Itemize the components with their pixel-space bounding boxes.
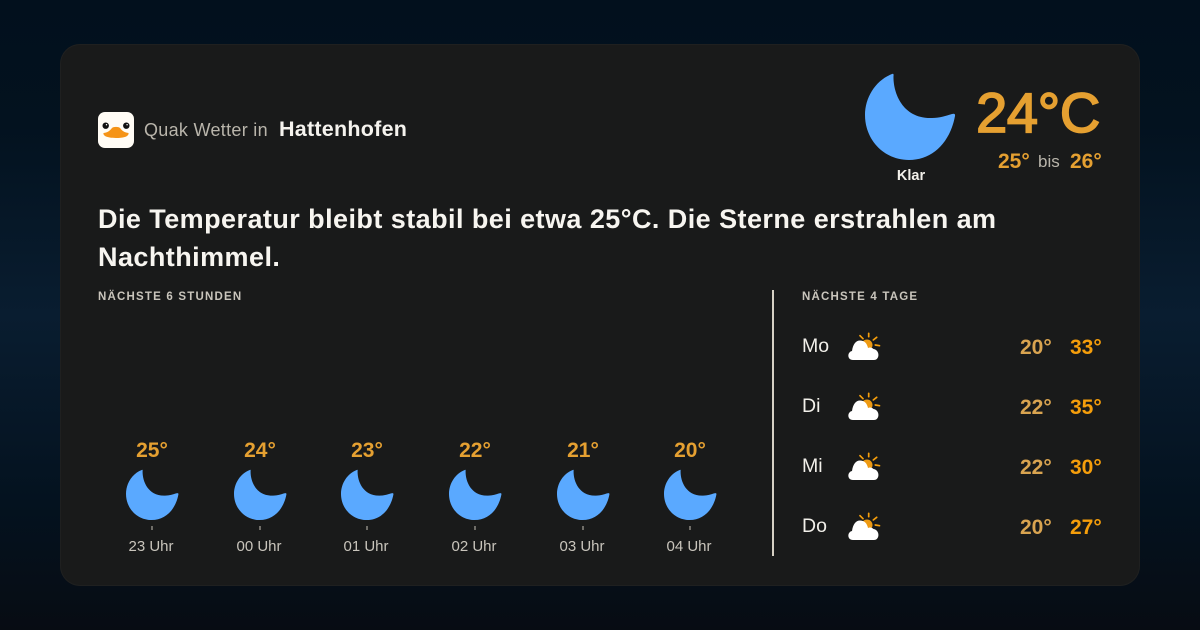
text: bis: bis [1038,152,1060,171]
divider [772,290,774,556]
text: time 02 Uhr: 02 Uhr [451,538,497,555]
text: temperature 00 Uhr: 24° [244,439,276,462]
text: Tuesday high: 35° [1070,396,1102,419]
icon: sun behind cloud Wednesday [848,452,880,480]
text: Thursday: Do [802,515,827,537]
icon: duck logo [98,112,134,148]
text: Monday: Mo [802,335,829,357]
text: time 04 Uhr: 04 Uhr [666,538,712,555]
heading: next 4 days: NÄCHSTE 4 TAGE [802,291,918,303]
text: time 00 Uhr: 00 Uhr [236,538,282,555]
icon: moon 04 Uhr [664,470,716,520]
icon: moon 01 Uhr [341,470,394,520]
text: Tuesday: Di [802,395,820,417]
icon: moon 23 Uhr [126,470,178,520]
icon: moon 00 Uhr [234,470,286,520]
text: Tuesday low: 22° [1020,396,1052,419]
text: Wednesday: Mi [802,455,823,477]
text: brand label: Quak Wetter in [144,120,268,140]
text: time 23 Uhr: 23 Uhr [128,538,174,555]
text: temperature 03 Uhr: 21° [567,439,599,462]
text: low: 25° [998,150,1030,173]
panel: weather card [60,44,1140,586]
icon: large moon [865,74,956,160]
text: Thursday low: 20° [1020,516,1052,539]
text: Monday high: 33° [1070,336,1102,359]
text: temperature 04 Uhr: 20° [674,439,706,462]
icon: sun behind cloud Monday [848,332,880,360]
heading: next 6 hours: NÄCHSTE 6 STUNDEN [98,291,242,303]
panel: hourly forecast [126,439,716,555]
icon: moon 02 Uhr [449,470,502,520]
text: high: 26° [1070,150,1102,173]
text: temperature range [998,150,1102,173]
text: condition: Klar [897,168,925,184]
tick marks [151,526,691,530]
text: temperature 02 Uhr: 22° [459,439,491,462]
text: temperature 23 Uhr: 25° [136,439,168,462]
icon: sun behind cloud Thursday [848,512,880,540]
text: time 01 Uhr: 01 Uhr [343,538,389,555]
text: Thursday high: 27° [1070,516,1102,539]
text: Wednesday high: 30° [1070,456,1102,479]
text: city: Hattenhofen [279,117,407,141]
text: Monday low: 20° [1020,336,1052,359]
heading: summary [98,204,996,272]
icon: sun behind cloud Tuesday [848,392,880,420]
text: temperature 01 Uhr: 23° [351,439,383,462]
text: time 03 Uhr: 03 Uhr [559,538,605,555]
icon: moon 03 Uhr [557,470,610,520]
text: Wednesday low: 22° [1020,456,1052,479]
text: current temperature: 24°C [976,81,1100,144]
heading: summary: Die Temperatur bleibt stabil bei etwa 25°C. Die Sterne erstrahlen am [98,204,996,234]
panel: daily forecast [802,332,1102,540]
heading: summary: Nachthimmel. [98,242,280,272]
